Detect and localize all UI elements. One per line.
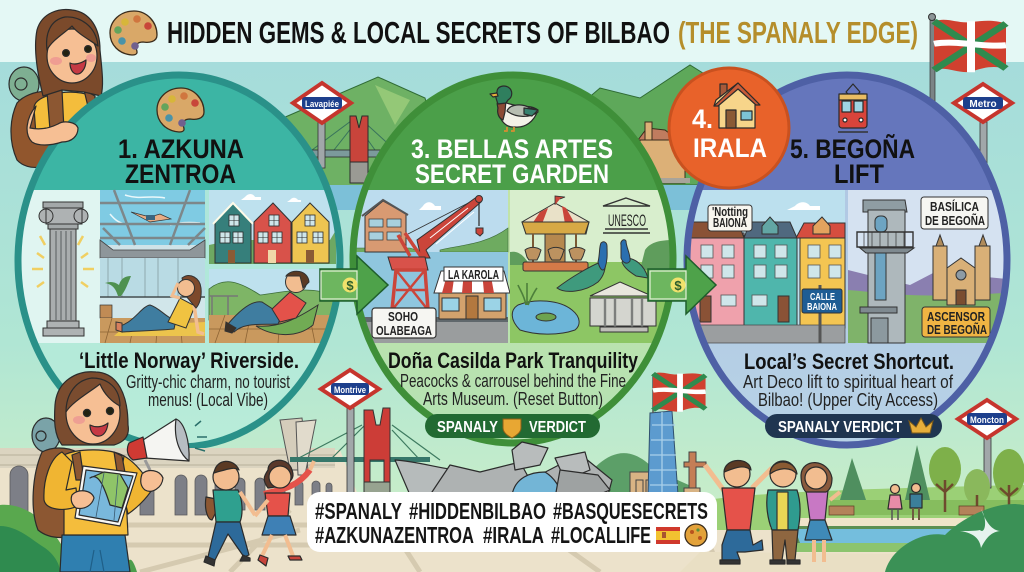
landmark: stone aqueduct — [0, 448, 335, 520]
label: Notting Baiona: BAIONA — [713, 215, 747, 230]
heading: Bellas Artes Secret Garden: SECRET GARDEN — [415, 159, 609, 189]
heading: Begoña Lift: LIFT — [834, 159, 884, 189]
image: Begoña lift and basilica — [848, 190, 1018, 343]
background: mountains and river — [283, 65, 722, 210]
text: Azkuna description: Gritty-chic charm, no tourist — [126, 372, 290, 392]
landmark: church behind Irala — [638, 122, 690, 183]
arrow: bill from Bellas Artes to Begoña — [648, 256, 716, 314]
label: Ascensor de Begoña: DE BEGOÑA — [927, 322, 987, 337]
badge: 4. Irala: IRALA — [693, 133, 767, 163]
badge: Spanaly verdict navy — [765, 414, 942, 438]
hashtag box: #AZKUNAZENTROA — [315, 522, 474, 548]
flag: Basque ikurrina top right — [928, 14, 1006, 107]
heading: Begoña Lift: 5. BEGOÑA — [790, 133, 915, 164]
label: Basílica de Begoña — [921, 197, 988, 229]
label: Calle Baiona — [802, 289, 842, 313]
caption: Local's Secret Shortcut: Local’s Secret Shortcut. — [744, 349, 954, 374]
text: Azkuna description: menus! (Local Vibe) — [148, 390, 268, 410]
hashtag box: #SPANALY — [315, 498, 402, 524]
sign: Lavapiés metro: Lavapiée — [305, 99, 339, 110]
icon: funicular tram — [838, 84, 868, 132]
image: man relaxing on deck — [209, 269, 336, 343]
panel: 3. Bellas Artes Secret Garden — [340, 60, 690, 443]
arrow: bill from Azkuna to Bellas Artes — [320, 256, 388, 314]
label: Calle Baiona: CALLE — [810, 291, 835, 303]
badge: Spanaly verdict green: SPANALY — [437, 419, 498, 436]
icon: paella — [685, 524, 707, 546]
park trees — [829, 445, 1024, 515]
caption: Doña Casilda: Doña Casilda Park Tranquility — [388, 348, 639, 373]
illustration: woman hiker top left — [9, 10, 103, 167]
image: glass pool with sunbather — [100, 190, 205, 343]
label: Notting Baiona — [708, 204, 752, 231]
sign: Metro: Metro — [969, 99, 997, 110]
panel: 5. Begoña Lift — [670, 60, 1020, 445]
hashtag box: #IRALA — [483, 522, 544, 548]
heading: Bellas Artes Secret Garden: 3. BELLAS ARTES — [411, 134, 613, 164]
label: La Karola — [444, 267, 503, 282]
image: ionic column — [22, 190, 100, 343]
badge: Spanaly verdict green — [425, 414, 600, 438]
sound lines — [195, 421, 207, 451]
hashtag box: #BASQUESECRETS — [553, 498, 708, 524]
sign: Lavapiés metro — [293, 83, 351, 168]
landmark: monument — [684, 452, 706, 498]
landmark: Iberdrola tower — [630, 411, 678, 497]
label: Ascensor de Begoña: ASCENSOR — [927, 309, 985, 324]
badge: Spanaly verdict navy: SPANALY VERDICT — [778, 419, 902, 436]
landmark: Guggenheim — [395, 442, 612, 498]
text: Bellas Artes description: Arts Museum. (Reset Button) — [423, 389, 603, 409]
arrow: bill from Bellas Artes to Begoña: $ — [674, 278, 682, 293]
title: HIDDEN GEMS & LOCAL SECRETS OF BILBAO — [167, 15, 670, 50]
image: colourful riverside houses — [209, 190, 336, 264]
header background — [0, 0, 1024, 62]
label: Calle Baiona: BAIONA — [807, 301, 837, 313]
people: couple holding hands — [204, 460, 314, 566]
title accent: (THE SPANALY EDGE) — [678, 15, 918, 50]
illustration: woman hiker with megaphone and map — [32, 372, 189, 572]
text: Begoña description: Bilbao! (Upper City Access) — [758, 390, 938, 410]
image: Notting Baiona houses — [680, 190, 845, 343]
icon: house — [714, 83, 760, 128]
hashtag box: #HIDDENBILBAO — [409, 498, 546, 524]
hand gripping the circle — [27, 106, 78, 145]
people: group of three — [705, 460, 840, 564]
badge: Spanaly verdict green: VERDICT — [529, 419, 586, 436]
label: La Karola: LA KAROLA — [448, 267, 499, 282]
sign: Metro — [954, 84, 1012, 168]
label: Basílica de Begoña: BASÍLICA — [930, 199, 979, 214]
text: Begoña description: Art Deco lift to spiritual heart of — [743, 372, 954, 392]
bridge behind circles — [310, 116, 400, 183]
people: small couple in park — [888, 484, 922, 520]
text: Bellas Artes description: Peacocks & carrousel behind the Fine — [400, 371, 626, 391]
badge: 4. Irala: 4. — [692, 104, 713, 134]
flag: Basque ikurrina centre — [653, 373, 706, 413]
heading: Azkuna Zentroa: ZENTROA — [125, 159, 236, 189]
label: Soho Olabeaga: SOHO — [388, 309, 418, 324]
image: crane and La Karola — [355, 190, 510, 343]
logo: UNESCO — [603, 198, 650, 233]
sign: Montrive metro: Montrive — [334, 385, 366, 396]
icon: duck — [490, 86, 538, 131]
label: Soho Olabeaga: OLABEAGA — [376, 323, 432, 338]
icon: Spanish flag — [656, 527, 680, 544]
ground: plaza and park — [0, 450, 1024, 572]
sign: Moncton metro — [958, 400, 1016, 488]
landmark: red suspension bridge — [290, 408, 440, 498]
landmark: Isozaki towers — [280, 418, 316, 475]
hashtag box: #LOCALLIFE — [551, 522, 651, 548]
badge: 4. Irala — [669, 68, 789, 188]
icon: palette — [157, 88, 204, 132]
label: Soho Olabeaga — [372, 308, 436, 338]
sparkle — [960, 509, 1000, 548]
hashtag box — [307, 492, 717, 552]
label: Notting Baiona: 'Notting — [712, 204, 748, 219]
image: carrousel, peacocks, museum — [510, 190, 680, 343]
icon: palette in header — [110, 11, 157, 55]
bushes — [0, 504, 1024, 572]
caption: Little Norway: ‘Little Norway’ Riverside. — [79, 348, 299, 373]
heading: Azkuna Zentroa: 1. AZKUNA — [118, 134, 244, 164]
sign: Moncton metro: Moncton — [970, 415, 1004, 426]
arrow: bill from Azkuna to Bellas Artes: $ — [346, 278, 354, 293]
sign: Montrive metro — [321, 370, 379, 494]
label: Basílica de Begoña: DE BEGOÑA — [925, 213, 985, 228]
logo: UNESCO: UNESCO — [608, 211, 646, 230]
label: Ascensor de Begoña — [922, 307, 990, 337]
panel: 1. Azkuna Zentroa — [14, 72, 344, 448]
